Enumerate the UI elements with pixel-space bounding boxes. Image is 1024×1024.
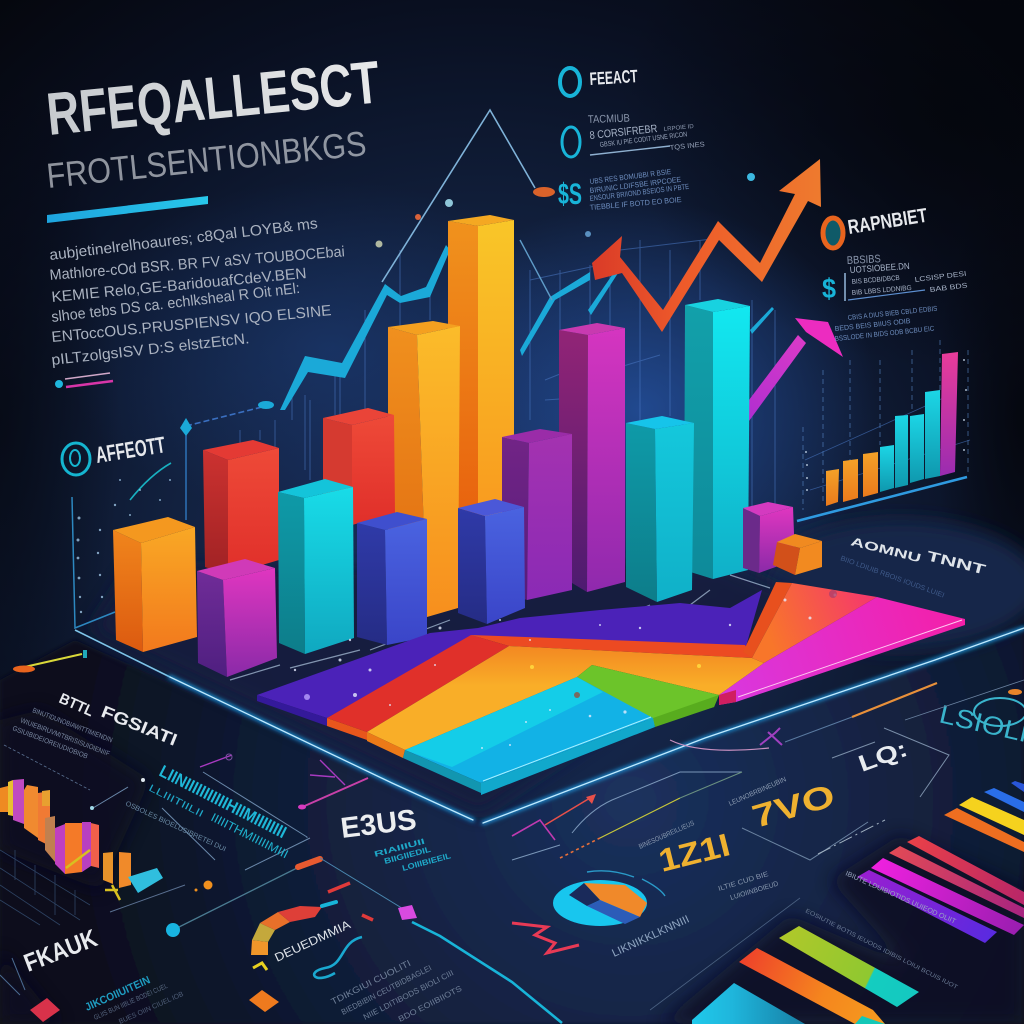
text block: bottom center: NIIE LDITIBODS BIOLI CIII [362,968,455,1022]
title: RFEQALLESCT [44,48,383,148]
paint specks [294,594,836,749]
bar: blue right [458,499,525,624]
bar: blue mid [357,512,427,645]
info block: clock: TACMIUB [588,113,630,126]
info block: dollar: BIRUNIC LDIFSBE IRPCOEE [589,175,682,195]
gauge label: DEUEDMMIA [272,917,353,965]
small labels centre: ILTIE CUD BIE [718,871,770,893]
panel: cyan heading text: OSBOLES BIOELUSIBRETEI DUI [124,800,227,853]
pink fold [719,597,965,705]
info block: right: BEDS BEIS BIIUS ODIB [834,318,911,333]
big yellow value 7VO: 7VO [748,777,839,835]
pie caption box: LIKNIKKLKNNIII [610,913,691,960]
small right bar chart [797,340,970,521]
info block: dollar: ENSOUR BRIIOND BSEIOS IN PBTE [589,182,689,203]
body text block: aubjetinelrelhoaures; c8Qal LOYB& ms [48,215,319,264]
connector pink [200,754,368,810]
body text block: Mathlore-cOd BSR. BR FV aSV TOUBOCEbai [49,243,345,284]
orange-red upper stripe [471,635,752,658]
icon: orange ring with label: RAPNBIET [846,205,929,239]
large E3US label: RIAIIIUII [373,837,426,859]
bar: small magenta [743,502,795,573]
label lower right of floor [839,534,988,600]
panel text lines left: GSIUIBIDEIOREIUDIOBIOB [11,725,89,761]
large E3US label: E3US [339,804,418,845]
big yellow value 1Z1: 1Z1I [655,826,734,879]
label lower right of floor: BIIO LDIUIB RBOIS IOUDS LUIEI [839,555,945,600]
stripe bars: red to violet [844,836,1024,943]
small labels centre: BINESOUBREILLIEUS [638,820,696,851]
info block: right: BSSLODE IN BIDS ODB BCBU EIC [834,326,935,343]
bar: cyan left [278,479,354,654]
cyan surface [405,677,653,783]
text block: bottom center: BIEDBIBIN CEUTBIDBAGLEI [340,963,433,1017]
info block: clock: GBSK IU PIE CODIT USNE RICON [599,131,688,149]
floor outline glow [170,628,1024,823]
panel text lines left: WIUIEBIRUVMITBRISISUIOIENIIF [19,717,110,758]
subtitle: FROTLSENTIONBKGS [45,124,368,196]
text block: bottom center: TDIKGIUI CUOLITI [329,958,412,1007]
coral fold [752,583,877,663]
info block: right: UOTSIOBEE.DN [849,261,910,275]
info block: clock: TQS INES [669,141,705,152]
gauge [251,902,336,970]
small labels centre [638,776,885,902]
bar: amber [388,321,460,617]
info block: right: LCSISP DESI [914,271,967,284]
info block: dollar: UBS RES BOMUBBI R BSIE [589,167,672,186]
label: lower left panel: JIKCOIIUITEIN [83,974,152,1014]
panel text lines left: BINUTIDUNOBIAWITTIMIENDIN [31,707,113,744]
large E3US label [339,804,452,873]
info block: clock: 8 CORSIFREBR [589,123,658,142]
orange zigzag arrow [592,159,821,332]
stripe bars: bottom [650,898,959,1024]
body text block: ENToccOUS.PRUSPIENSV IQO ELSINE [51,302,332,346]
line chart arrows [512,728,782,860]
magenta-cyan connector [398,905,562,1023]
bar: red back [323,408,395,525]
cyan squiggle [314,937,362,978]
info block: right: BBSIBS [847,253,881,267]
panel label: top left lower [56,690,180,750]
body text block: slhoe tebs DS ca. echlksheal R Oit nEl: [50,280,301,326]
title accent bar [47,196,208,223]
dark panels lower area [0,710,1024,1024]
bar: orange left [113,517,197,652]
info block: right: $ [822,273,836,304]
panel text lines left [4,707,113,790]
chart floor frame [72,497,770,680]
icon: left ring with label [62,431,167,475]
panel label: top left lower: BTTL [56,690,96,720]
stripe bars: bottom: EOSIUTIE BOTIS IEUODS IDIBIS LOIUI BCUIS IUOT [804,908,959,991]
body text block: KEMIE Relo,GE-BaridouafCdeV.BEN [51,265,307,306]
bar: cyan short [626,416,694,602]
bar: magenta tall [559,323,625,592]
body text block: pILTzolgsISV D:S elstzEtcN. [51,330,250,369]
panel: cyan heading text [90,762,310,870]
info block: right: BIB LBBS LDDNIBG [852,285,912,297]
panel: cyan heading text: LIINIIIIIIIIIIIHIIMIIIIIIII [156,762,290,842]
panel: cyan heading text: IIIIITHMIIIIIMIII [209,810,291,861]
cyan label top right: LSIOLI [937,699,1024,748]
icon: top cyan ring with label [560,66,638,96]
body text block [48,215,345,369]
info block: dollar: $S [558,178,582,211]
amber band [367,646,764,750]
icon: orange pencil mark [13,650,87,672]
large E3US label: LOIIIBIEEIL [401,851,452,873]
info block: clock [562,113,705,157]
label: lower left panel: FKAUK [20,924,101,978]
bar: small orange cube [773,534,822,575]
bar: cyan tall [684,299,750,579]
icon: top cyan ring with label: FEEACT [589,66,638,89]
info block: right: BAB BDS [929,282,968,294]
bar: purple [502,429,572,600]
label: lower left panel [0,924,185,1024]
icon: orange ring with label [823,205,929,248]
red scribble [512,923,579,953]
blue trend line [130,110,774,520]
background grid lines behind chart [240,238,775,560]
info block: dollar: TIEBBLE IF BOTD EO BOIE [589,195,682,212]
panel label: top left lower: FGSIATI [99,702,180,750]
small legend marks [55,373,113,388]
label lower right of floor: TNNT [925,547,988,578]
label: lower left panel: GLIIS BUN IIBLIE BODEI CUEL [93,983,169,1022]
green block [577,665,719,725]
cyan label top right [905,680,1024,748]
bar: tall amber back [448,215,514,520]
orange right fold [743,582,792,658]
scattered data dots [76,479,171,613]
stripe bars: red to violet: IBIUTE LDUIBIOTIDS UUIEOD OLIIT [844,870,957,926]
pie chart [553,871,665,926]
icon: orange lozenge [249,990,279,1012]
magenta arrow [749,318,843,421]
left grid table [0,850,90,925]
purple band [257,590,762,718]
symbol panel: LQ: [855,735,911,777]
small labels centre: LUIOIINBOIEUD [730,881,779,902]
info block: clock: LRPOIE ID [664,124,695,133]
3D bars [113,215,822,677]
stripe bars: upper right [944,781,1024,852]
info block: right: CBIS A DIUS BIEB CBLD EDBIS [847,306,938,322]
red band [327,635,509,732]
bar: red left [203,440,279,575]
symbol panel [785,683,949,797]
panel: cyan heading text: LLIIITIILII [147,783,205,820]
connectors: lower left [110,858,405,937]
text block: bottom center [329,958,463,1024]
text block: bottom center: BDO EOIIBIIOTS [397,984,463,1024]
large E3US label: BIIGIIEDIL [383,845,432,866]
rainbow map slab [257,582,965,795]
info block: right [822,253,968,343]
info block: right: BIS BCDBIDBCB [852,275,900,286]
info block: dollar [558,167,689,212]
label lower right of floor: AOMNU [849,534,923,565]
mini 3D bar cluster [0,779,163,900]
icon: left ring with label: AFFEOTT [94,431,167,468]
bar: magenta left [197,559,277,677]
small labels centre: LEUNOBRBINEUBIN [728,776,787,808]
